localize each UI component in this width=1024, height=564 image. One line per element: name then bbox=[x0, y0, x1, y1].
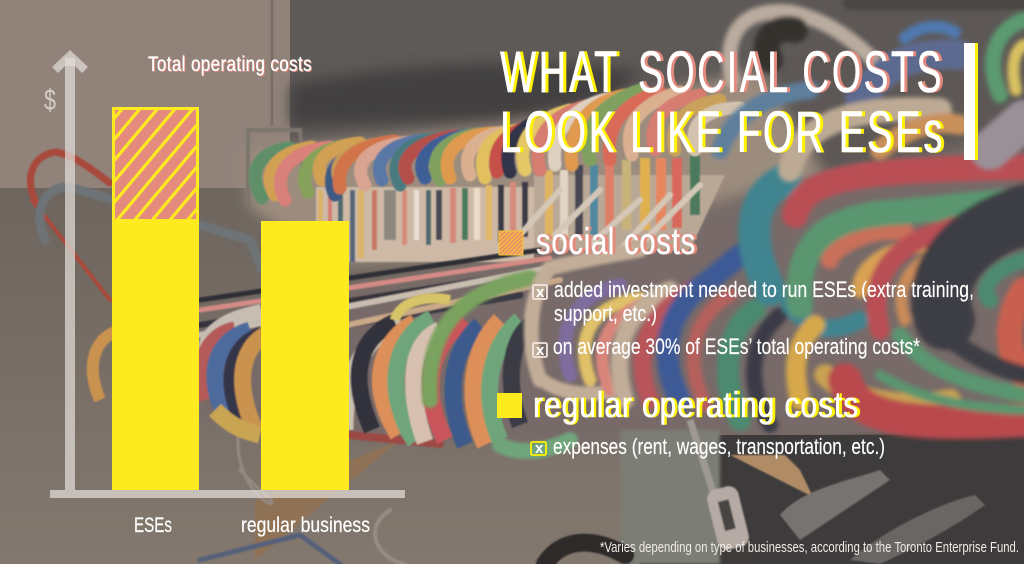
icon: checkbox x: x bbox=[536, 284, 545, 301]
bullet: on average 30%: on average 30% of ESEs’ total operating costs* bbox=[553, 334, 920, 359]
icon: checkbox x: x bbox=[536, 342, 545, 359]
near hanger hooks, right bbox=[619, 167, 1024, 425]
bullet: added investment bbox=[554, 277, 974, 326]
bar: ESEs bbox=[112, 108, 199, 490]
foreground clutter bbox=[690, 420, 985, 564]
title side bar bbox=[964, 43, 978, 160]
bar: regular business bbox=[261, 221, 349, 490]
bullet: added investment: support, etc.) bbox=[554, 301, 657, 326]
dollar axis label: $ bbox=[44, 84, 56, 117]
diagonal hanger bars bbox=[200, 185, 700, 444]
icon: yellow swatch bbox=[497, 393, 522, 418]
title: WHAT bbox=[500, 40, 620, 105]
near hanger hooks, left bbox=[93, 298, 530, 445]
heading: social costs: social costs bbox=[539, 221, 699, 262]
icon: checkbox x bbox=[533, 284, 547, 301]
icon: hatched swatch bbox=[499, 231, 523, 255]
near hanger underlay bbox=[200, 130, 1024, 445]
chart label: total operating costs: Total operating costs bbox=[148, 53, 312, 76]
far hanger hooks bbox=[255, 90, 740, 200]
legend: regular operating costs bbox=[497, 384, 885, 459]
far hanger rail underlay bbox=[247, 70, 840, 265]
icon: checkbox x bbox=[531, 440, 546, 457]
icon: checkbox x bbox=[533, 342, 547, 359]
heading: regular operating costs: regular operating costs bbox=[535, 384, 862, 425]
title bbox=[500, 40, 948, 165]
legend: social costs bbox=[499, 221, 974, 359]
top right hangers bbox=[720, 3, 1024, 170]
heading: social costs: social costs bbox=[536, 221, 696, 262]
axis bbox=[50, 50, 405, 498]
vertical strips under rail bbox=[316, 155, 725, 262]
bar label: regular business: regular business bbox=[241, 514, 370, 537]
heading: regular operating costs: regular operating costs bbox=[533, 384, 859, 425]
bullet: expenses: expenses (rent, wages, transportation, etc.) bbox=[553, 434, 885, 459]
chart label: total operating costs: Total operating costs bbox=[149, 54, 313, 77]
title: WHAT bbox=[503, 40, 623, 105]
icon: checkbox x: x bbox=[535, 440, 544, 457]
bar label: ESEs: ESEs bbox=[134, 514, 172, 537]
